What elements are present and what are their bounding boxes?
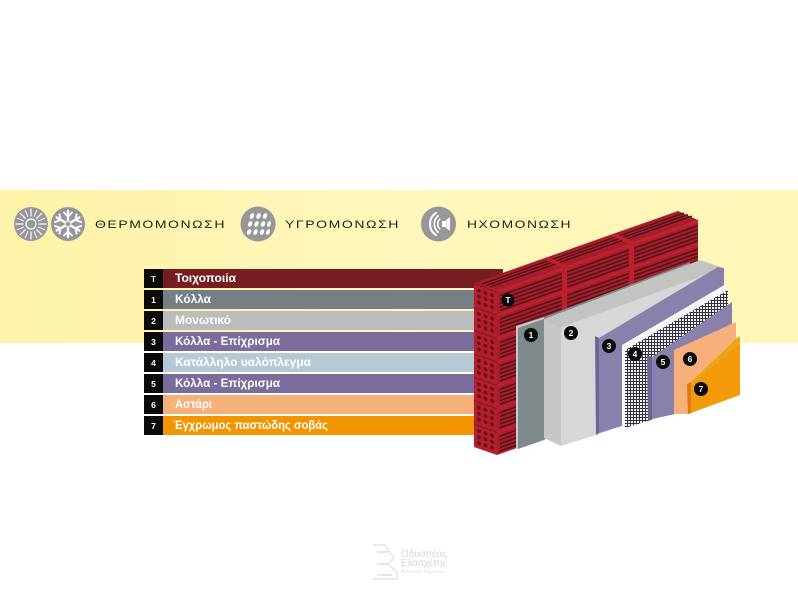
legend row T: masonry: Τ bbox=[151, 274, 157, 284]
badge 6 bbox=[683, 352, 697, 366]
badge 5 bbox=[656, 355, 670, 369]
wall long face bbox=[495, 220, 698, 456]
legend row 2: insulation: Μονωτικό bbox=[175, 315, 231, 327]
heading: sound insulation: ΗΧΟΜΟΝΩΣΗ bbox=[467, 219, 572, 231]
logo: Ελασχέτης bbox=[401, 557, 447, 569]
icon: sun bbox=[14, 207, 48, 241]
badge 4: 4 bbox=[633, 349, 638, 359]
logo bbox=[373, 545, 447, 579]
badge 4 bbox=[628, 347, 642, 361]
wall end face with brick holes bbox=[474, 283, 497, 455]
heading: damp proofing: ΥΓΡΟΜΟΝΩΣΗ bbox=[285, 219, 400, 231]
legend row 2: insulation bbox=[144, 311, 493, 330]
legend row 1: adhesive: 1 bbox=[151, 295, 156, 305]
layer 2: insulation bbox=[544, 260, 723, 446]
layer 7: coloured render bbox=[687, 337, 740, 414]
legend row 4: glass mesh: Κατάλληλο υαλόπλεγμα bbox=[175, 357, 311, 369]
badge 2 bbox=[564, 326, 578, 340]
badge 3: 3 bbox=[607, 341, 612, 351]
layer 3: adhesive plaster bbox=[595, 267, 724, 435]
legend row 5: adhesive plaster bbox=[144, 374, 493, 393]
badge 2: 2 bbox=[569, 328, 574, 338]
legend table bbox=[144, 269, 503, 435]
badge T bbox=[502, 294, 514, 306]
badge 5: 5 bbox=[661, 357, 666, 367]
icon: sound bbox=[421, 206, 456, 242]
logo: Τεχνολογία Τοιχοποιίας bbox=[401, 569, 446, 574]
icon: snowflake bbox=[51, 207, 85, 241]
yellow background band bbox=[0, 190, 798, 343]
legend row 7: coloured render: 7 bbox=[151, 421, 156, 431]
logo: Οδυσσέας bbox=[401, 548, 447, 560]
legend row 1: adhesive bbox=[144, 290, 493, 309]
badge 3 bbox=[602, 339, 616, 353]
heading: thermal insulation: ΘΕΡΜΟΜΟΝΩΣΗ bbox=[95, 219, 226, 231]
layer 1: adhesive bbox=[516, 262, 690, 449]
legend row 5: adhesive plaster: Κόλλα - Επίχρισμα bbox=[175, 378, 280, 390]
badge 7: 7 bbox=[699, 384, 704, 394]
brick wall bbox=[474, 211, 698, 456]
badge 7 bbox=[694, 382, 708, 396]
badge 1: 1 bbox=[529, 330, 534, 340]
legend row 3: adhesive plaster: 3 bbox=[151, 337, 156, 347]
legend row 6: primer: Αστάρι bbox=[175, 399, 212, 411]
legend row 6: primer bbox=[144, 395, 493, 414]
legend row 5: adhesive plaster: 5 bbox=[151, 379, 156, 389]
legend row T: masonry: Τοιχοποιία bbox=[175, 273, 236, 285]
layer 5: adhesive plaster bbox=[647, 302, 732, 421]
legend row 4: glass mesh bbox=[144, 353, 493, 372]
legend row 7: coloured render: Έγχρωμος παστώδης σοβάς bbox=[173, 420, 328, 432]
legend row T: masonry bbox=[144, 269, 503, 288]
wall top face bbox=[474, 211, 698, 291]
legend row 3: adhesive plaster: Κόλλα - Επίχρισμα bbox=[175, 336, 280, 348]
legend row 6: primer: 6 bbox=[151, 400, 156, 410]
legend row 3: adhesive plaster bbox=[144, 332, 493, 351]
icon: water drops bbox=[240, 206, 276, 242]
legend row 2: insulation: 2 bbox=[151, 316, 156, 326]
badge T: Τ bbox=[505, 295, 511, 305]
legend row 1: adhesive: Κόλλα bbox=[175, 294, 211, 306]
badge 1 bbox=[524, 328, 538, 342]
legend row 4: glass mesh: 4 bbox=[151, 358, 156, 368]
layer 4: glass fibre mesh bbox=[622, 284, 728, 428]
badge 6: 6 bbox=[688, 354, 693, 364]
layer 6: primer bbox=[674, 322, 736, 414]
legend row 7: coloured render bbox=[144, 416, 493, 435]
